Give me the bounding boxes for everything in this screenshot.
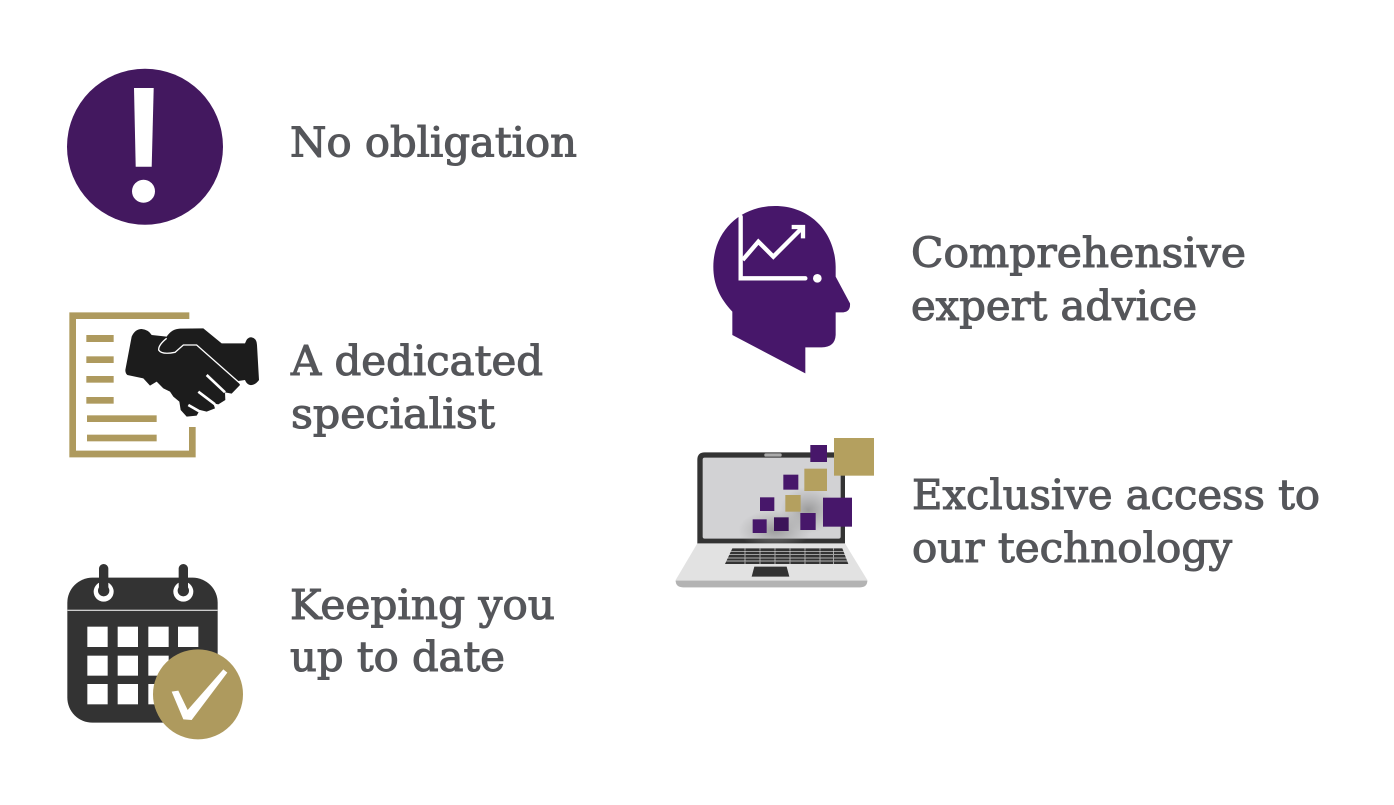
icon: laptop with pixels <box>676 438 874 587</box>
text: Keeping you up to date: up to date <box>290 633 505 681</box>
text: Keeping you up to date <box>290 581 555 681</box>
text: A dedicated specialist: A dedicated <box>290 337 543 385</box>
text: Keeping you up to date: Keeping you <box>290 581 555 629</box>
icon: head with growth chart <box>713 206 850 373</box>
text: Exclusive access to our technology: Exclusive access to <box>912 471 1320 519</box>
text: No obligation: No obligation <box>290 119 577 167</box>
text: Comprehensive expert advice <box>911 229 1246 330</box>
text: Exclusive access to our technology: our technology <box>912 524 1233 572</box>
text: Comprehensive expert advice: Comprehensive <box>911 229 1246 277</box>
text: Comprehensive expert advice: expert advice <box>911 282 1197 330</box>
icon: exclamation circle <box>67 69 223 225</box>
text: Exclusive access to our technology <box>912 471 1320 572</box>
icon: document with handshake <box>69 312 259 457</box>
text: A dedicated specialist <box>290 337 543 438</box>
icon: calendar with check <box>67 564 243 739</box>
text: A dedicated specialist: specialist <box>291 390 496 438</box>
